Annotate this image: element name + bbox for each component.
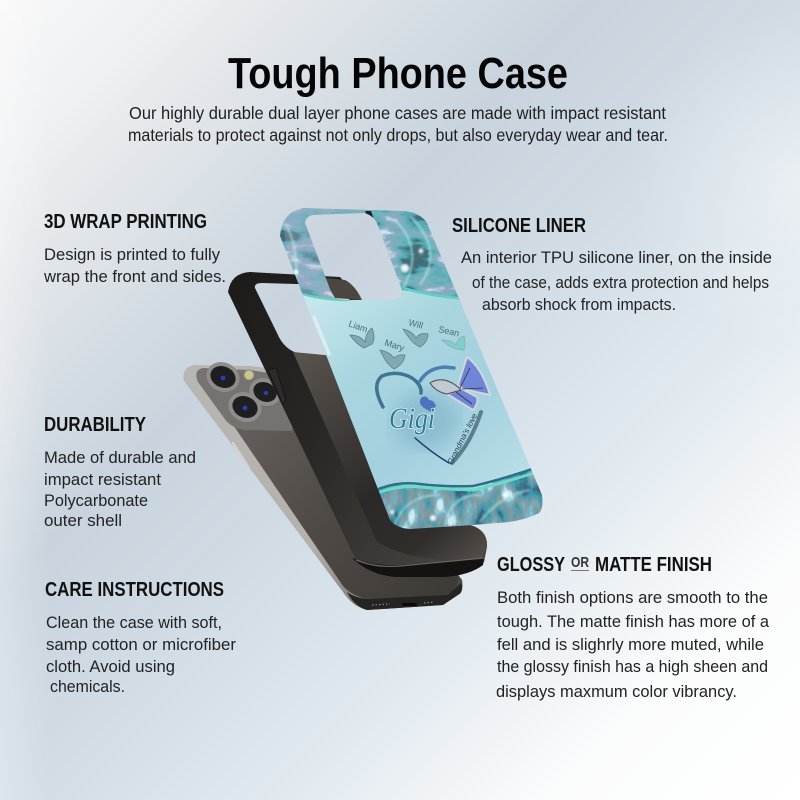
lower teal band [376, 468, 537, 493]
side button on case [314, 317, 329, 354]
panel: 3D wrap printing: 3D WRAP PRINTING [44, 211, 207, 233]
top pattern band [280, 208, 462, 305]
panel: glossy or matte finish: GLOSSY [497, 554, 566, 576]
panel: silicone liner: absorb shock from impacts. [482, 295, 676, 314]
phone body [183, 365, 462, 610]
panel: care instructions: chemicals. [50, 677, 125, 696]
panel: durability [44, 414, 196, 530]
name Gigi: Gigi [389, 402, 435, 435]
small butterfly Liam [347, 318, 374, 348]
subtitle: materials to protect against not only drops, but also everyday wear and tear. [128, 125, 668, 145]
side button [233, 443, 249, 468]
metallic centre panel [290, 290, 535, 492]
panel: care instructions [45, 579, 236, 696]
upper teal band [296, 288, 458, 300]
phone [183, 357, 462, 610]
case interior [293, 352, 487, 560]
panel: durability: Made of durable and [44, 448, 196, 467]
small butterfly Sean: Sean [438, 324, 460, 338]
dark vertical stripe [365, 211, 374, 218]
lens right [245, 373, 285, 411]
title: Tough Phone Case [228, 49, 568, 98]
glow streaks [286, 216, 530, 525]
top right rim [323, 278, 362, 300]
panel: glossy or matte finish: OR [571, 554, 589, 571]
small butterfly Will: Will [407, 317, 424, 331]
panel: durability: impact resistant [44, 470, 161, 489]
panel: glossy or matte finish: the glossy finish has a high sheen and [497, 657, 768, 676]
small butterfly Liam: Liam [347, 318, 369, 335]
phone back [197, 372, 458, 599]
panel: care instructions: samp cotton or microfiber [46, 635, 236, 654]
large butterfly [430, 357, 490, 410]
small butterfly Sean [438, 324, 465, 350]
lens top [201, 357, 245, 397]
speaker and port [372, 602, 434, 606]
patterned phone case [280, 208, 542, 529]
panel: 3D wrap printing: wrap the front and sides. [43, 267, 226, 286]
panel: silicone liner [452, 215, 772, 314]
black case [228, 272, 487, 577]
soft shadow behind heart [393, 392, 457, 448]
panel: 3D wrap printing [43, 211, 226, 286]
panel: care instructions: cloth. Avoid using [46, 657, 175, 676]
small butterfly Mary [380, 337, 406, 369]
panel: glossy or matte finish [496, 554, 770, 701]
panel: care instructions: Clean the case with soft, [46, 613, 222, 632]
sparkles [294, 248, 508, 521]
camera plateau [196, 368, 300, 431]
side buttons [268, 368, 286, 405]
panel: glossy or matte finish: Both finish options are smooth to the [497, 588, 768, 607]
subtitle [128, 103, 668, 145]
panel: durability: Polycarbonate [44, 491, 148, 510]
lens bottom [223, 387, 267, 427]
panel: care instructions: CARE INSTRUCTIONS [45, 579, 224, 601]
panel: glossy or matte finish: displays maxmum color vibrancy. [496, 682, 737, 701]
small hearts [420, 396, 436, 412]
panel: durability: outer shell [44, 511, 122, 530]
panel: silicone liner: SILICONE LINER [452, 215, 586, 237]
bottom lip [352, 558, 484, 577]
panel: silicone liner: of the case, adds extra protection and helps [472, 273, 769, 292]
heart [377, 367, 481, 463]
bottom pattern band [370, 470, 542, 529]
small butterfly Mary: Mary [383, 337, 406, 353]
panel: glossy or matte finish: MATTE FINISH [595, 554, 712, 576]
flash [244, 370, 254, 380]
panel: 3D wrap printing: Design is printed to fully [44, 245, 220, 264]
script message: Grandma's love [446, 411, 479, 466]
bottom edge [347, 583, 462, 610]
small butterfly Will [403, 317, 428, 347]
panel: silicone liner: An interior TPU silicone liner, on the inside [461, 248, 772, 267]
subtitle: Our highly durable dual layer phone cases are made with impact resistant [129, 103, 666, 123]
panel: glossy or matte finish: fell and is slighrly more muted, while [497, 635, 764, 654]
panel: glossy or matte finish: tough. The matte finish has more of a [497, 612, 770, 631]
left band tint [284, 208, 335, 298]
panel: durability: DURABILITY [44, 414, 147, 436]
